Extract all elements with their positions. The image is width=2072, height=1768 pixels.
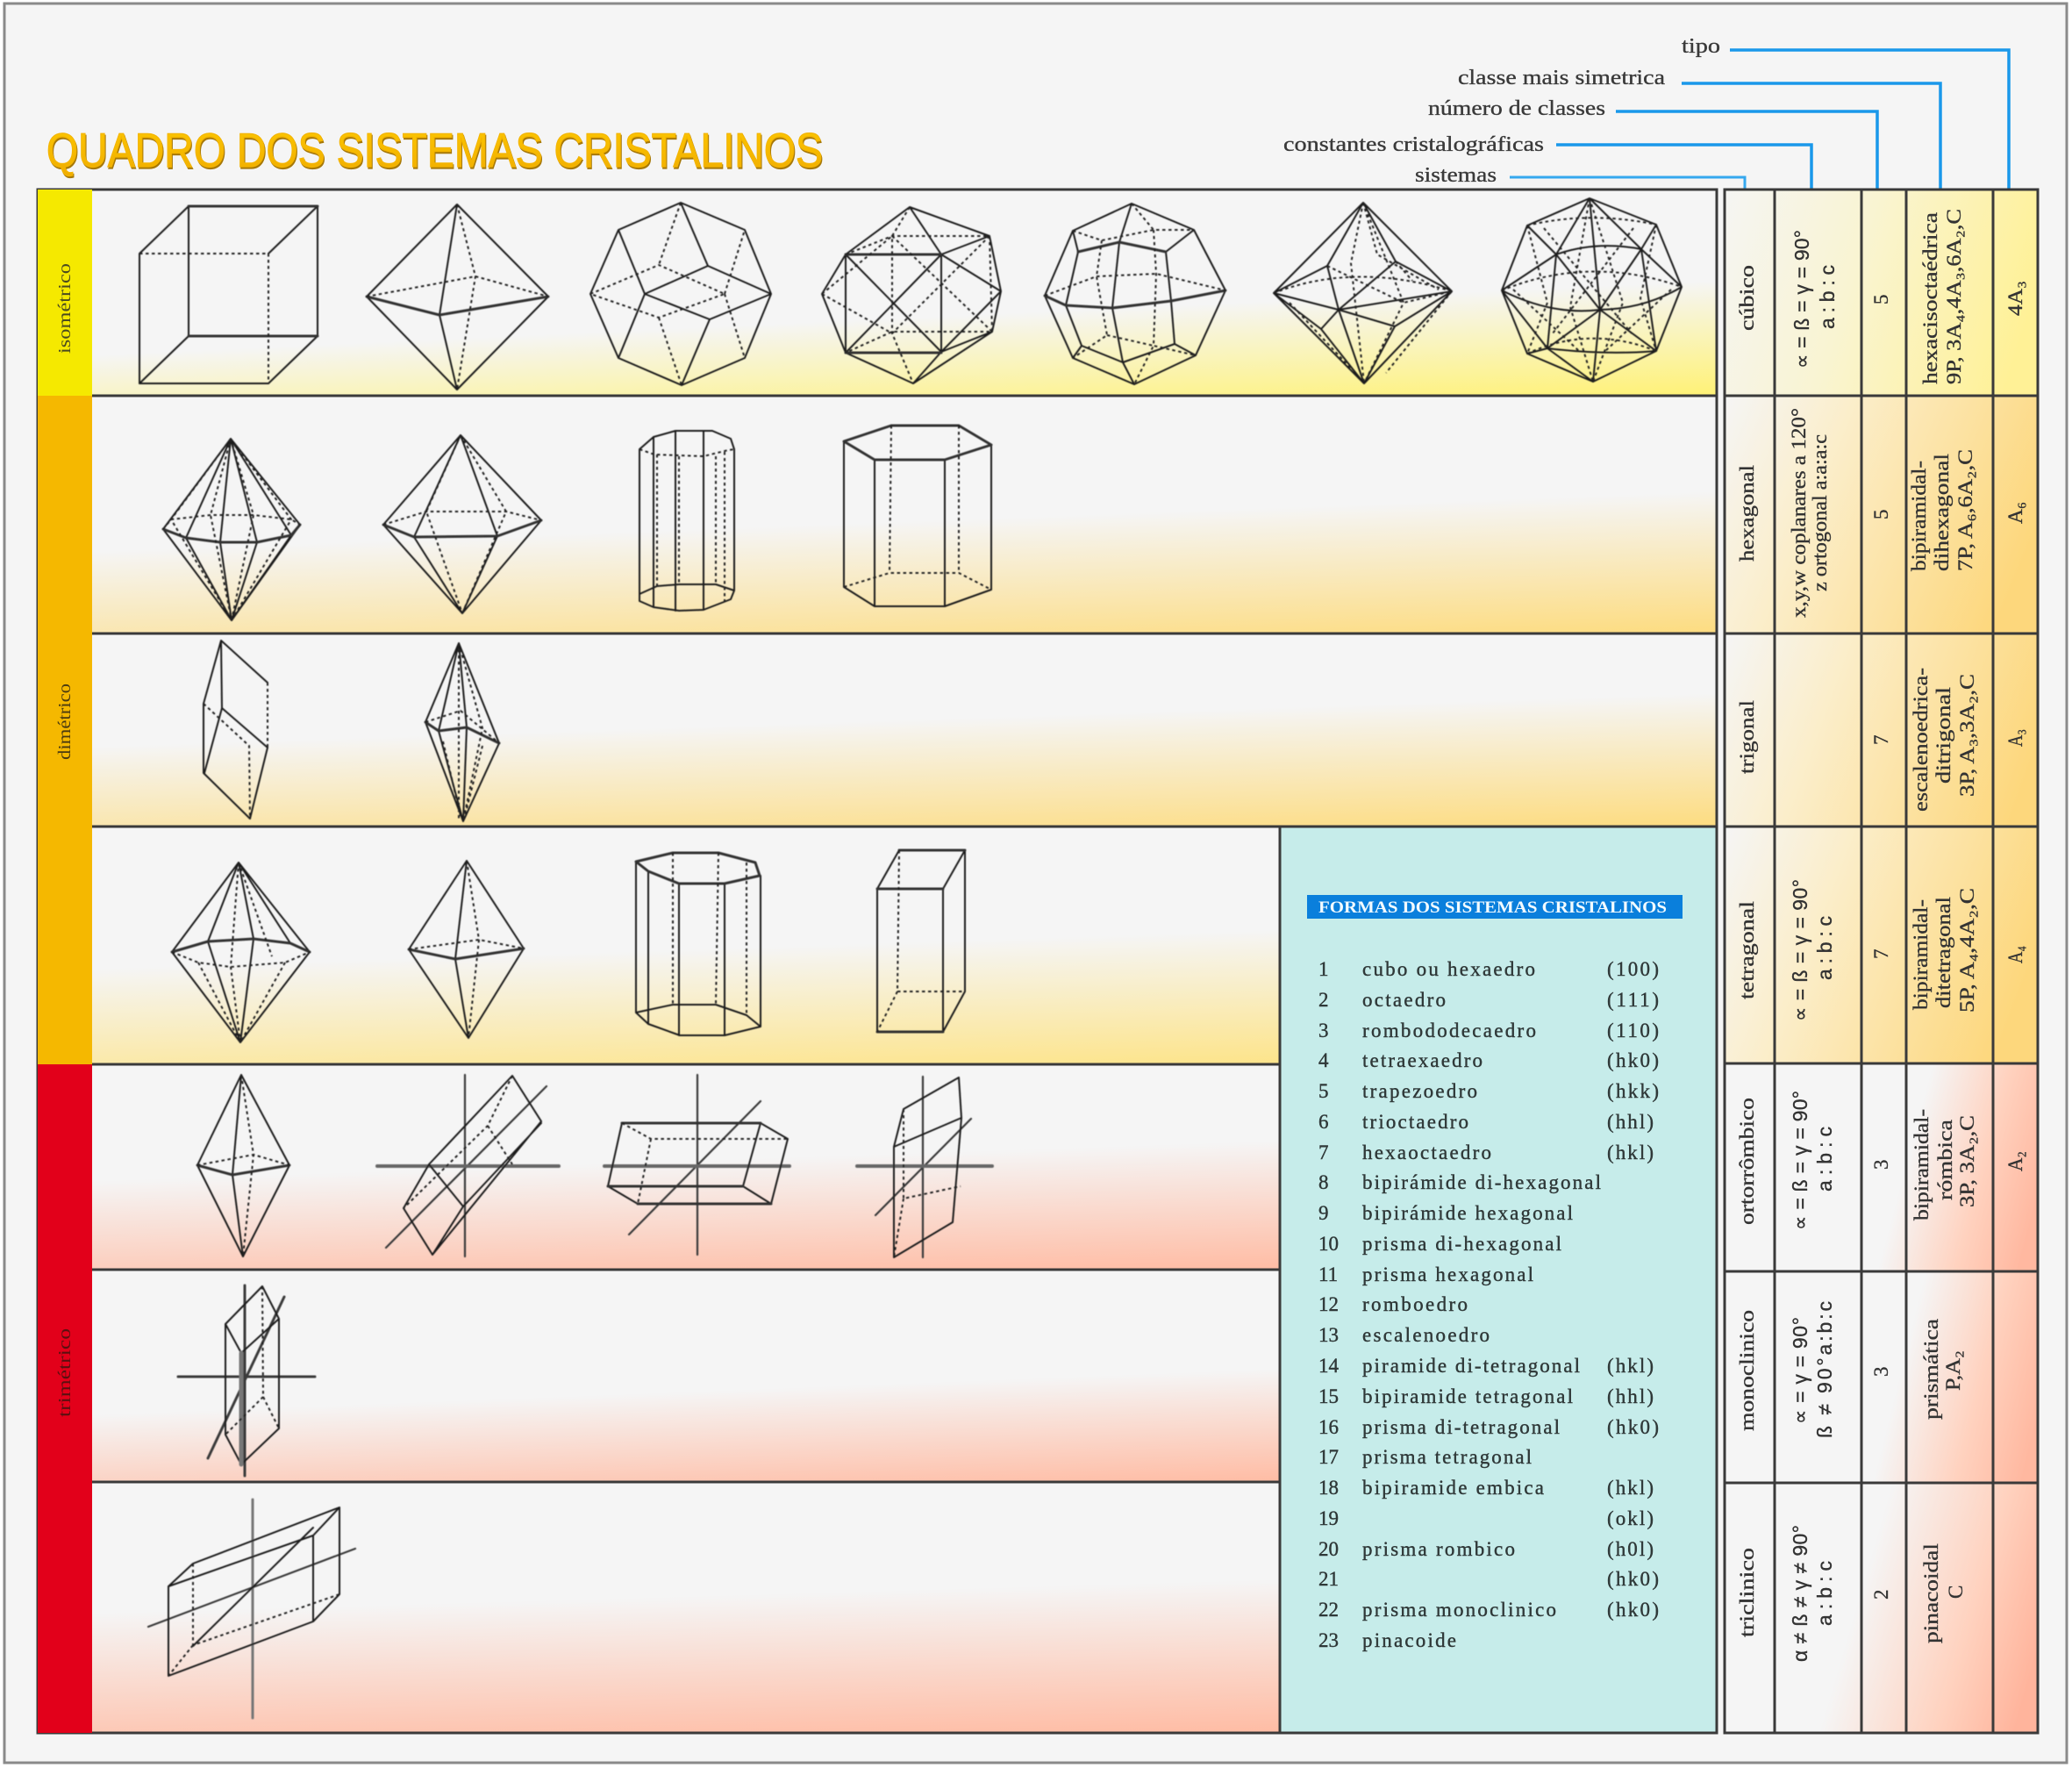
legend Miller indices: (hk0) <box>1607 1568 1659 1590</box>
legend form names: prisma rombico <box>1362 1538 1515 1560</box>
row: triclinico: pinacoidal <box>1920 1543 1942 1643</box>
row: triclinico: 2 <box>1870 1590 1892 1600</box>
legend numbers: 19 <box>1318 1507 1339 1529</box>
key: sistemas <box>1415 164 1745 190</box>
legend numbers: 13 <box>1318 1324 1339 1346</box>
row: trigonal: 3P, A₃,3A₂,C <box>1956 674 1978 797</box>
row: ortorrômbico: a:b:c <box>1813 1127 1836 1192</box>
row 2 crystals: hexagonal <box>163 426 991 620</box>
crystal table grid lines <box>38 190 1717 1733</box>
row: hexagonal: dihexagonal <box>1931 454 1953 571</box>
legend Miller indices: (111) <box>1607 989 1659 1011</box>
row: hexagonal: 7P, A₆,6A₂,C <box>1954 449 1976 571</box>
legend form names: bipirámide di-hexagonal <box>1362 1171 1601 1193</box>
legend Miller indices: (hk0) <box>1607 1049 1659 1071</box>
crystal: octahedron <box>367 204 548 390</box>
crystal: scalenohedron <box>425 643 499 821</box>
legend Miller indices: (hk0) <box>1607 1416 1659 1438</box>
row: trigonal <box>1725 633 2038 827</box>
legend numbers: 4 <box>1318 1049 1329 1071</box>
legend numbers <box>1318 958 1339 1651</box>
legend form names: tetraexaedro <box>1362 1049 1483 1071</box>
key: classe mais simetrica: classe mais simetrica <box>1458 67 1665 89</box>
key: constantes cristalográficas <box>1283 133 1811 190</box>
legend Miller indices: (hkl) <box>1607 1355 1654 1377</box>
crystal: rhombic prism with axes <box>377 1075 559 1256</box>
legend form names: piramide di-tetragonal <box>1362 1355 1580 1377</box>
panel: legend of crystal forms <box>1280 827 1717 1733</box>
row: tetragonal: 5P, A₄,4A₂,C <box>1956 888 1978 1013</box>
crystal: ditetragonal bipyramid <box>172 863 310 1042</box>
row: ortorrômbico <box>1725 1064 2038 1271</box>
row: trigonal: A₃ <box>2004 729 2026 747</box>
properties table <box>1725 190 2038 1733</box>
crystal: tetrakis hexahedron <box>822 207 1001 383</box>
crystal: hexagonal prism <box>844 426 991 606</box>
row: tetragonal: a:b:c <box>1813 916 1836 980</box>
title: QUADRO DOS SISTEMAS CRISTALINOS <box>46 123 823 177</box>
legend form names: cubo ou hexaedro <box>1362 958 1535 980</box>
legend form names: prisma monoclinico <box>1362 1599 1556 1621</box>
legend numbers: 20 <box>1318 1538 1339 1560</box>
key: sistemas: sistemas <box>1415 164 1497 187</box>
legend numbers: 17 <box>1318 1446 1339 1468</box>
row: tetragonal: A₄ <box>2004 946 2026 963</box>
row: ortorrômbico: ∝ = ß = γ = 90° <box>1789 1091 1811 1230</box>
legend heading: FORMAS DOS SISTEMAS CRISTALINOS <box>1318 898 1667 917</box>
row 3 crystals: trigonal <box>204 641 499 821</box>
row: hexagonal: 5 <box>1870 509 1892 519</box>
legend Miller indices: (100) <box>1607 958 1659 980</box>
row 5 crystals: orthorhombic <box>197 1075 992 1257</box>
row: triclinico: triclinico <box>1736 1548 1758 1637</box>
system colour bars <box>38 190 92 1733</box>
crystal: rhombododecahedron <box>590 203 771 385</box>
legend form names: prisma tetragonal <box>1362 1446 1532 1468</box>
row: ortorrômbico: 3P, 3A₂,C <box>1956 1115 1978 1207</box>
row: ortorrômbico: ortorrômbico <box>1736 1098 1758 1225</box>
row: cúbico: 4A₃ <box>2004 281 2026 316</box>
legend Miller indices: (hhl) <box>1607 1385 1654 1407</box>
row: cúbico: a:b:c <box>1816 265 1839 329</box>
row: triclinico <box>1725 1483 2038 1733</box>
legend form names: octaedro <box>1362 989 1446 1011</box>
legend numbers: 11 <box>1318 1263 1338 1285</box>
row: cúbico: 9P, 3A₄,4A₃,6A₂,C <box>1943 209 1965 384</box>
key: classe mais simetrica <box>1458 67 1940 190</box>
bar: trimétrico <box>38 1064 92 1733</box>
row: cúbico: ∝ = ß = γ = 90° <box>1790 230 1813 369</box>
row: hexagonal: z ortogonal a:a:a:c <box>1809 434 1831 591</box>
row 4 crystals: tetragonal <box>172 850 965 1042</box>
legend form names: bipirámide hexagonal <box>1362 1202 1573 1224</box>
crystal: hexoctahedron <box>1502 198 1682 382</box>
crystal: tetragonal bipyramid <box>409 861 524 1038</box>
legend numbers: 15 <box>1318 1385 1339 1407</box>
row: tetragonal: ∝ = ß = γ = 90° <box>1789 879 1811 1021</box>
row: triclinico: C <box>1945 1585 1967 1599</box>
legend numbers: 9 <box>1318 1202 1328 1224</box>
key: tipo <box>1682 35 2009 190</box>
legend numbers: 16 <box>1318 1416 1339 1438</box>
row: ortorrômbico: bipiramidal- <box>1911 1109 1933 1220</box>
crystal: ditetragonal prism <box>636 853 761 1035</box>
legend form names: trapezoedro <box>1362 1080 1477 1102</box>
row: monoclinico: monoclinico <box>1736 1310 1758 1431</box>
legend numbers: 14 <box>1318 1355 1339 1377</box>
legend form names: bipiramide embica <box>1362 1477 1544 1499</box>
legend form names: prisma di-hexagonal <box>1362 1233 1561 1255</box>
legend form names: pinacoide <box>1362 1629 1456 1651</box>
legend Miller indices: (110) <box>1607 1020 1659 1041</box>
legend form names: escalenoedro <box>1362 1324 1490 1346</box>
row: cúbico <box>1725 190 2038 396</box>
legend Miller indices: (hkl) <box>1607 1142 1654 1163</box>
row: trigonal: ditrigonal <box>1933 687 1954 784</box>
row: trigonal: escalenoedrica- <box>1910 668 1932 812</box>
crystal: horizontal prism with axes <box>604 1075 790 1255</box>
legend Miller indices: (hkk) <box>1607 1080 1659 1102</box>
row: tetragonal: 7 <box>1870 949 1892 959</box>
bar: trimétrico: trimétrico <box>55 1328 75 1417</box>
legend Miller indices: (hk0) <box>1607 1599 1659 1621</box>
bar: isométrico: isométrico <box>55 263 75 354</box>
crystal: trapezohedron <box>1045 204 1225 384</box>
row: triclinico: α ≠ ß ≠ γ ≠ 90° <box>1789 1525 1811 1662</box>
legend numbers: 7 <box>1318 1142 1328 1163</box>
key: tipo: tipo <box>1682 35 1720 58</box>
legend form names: prisma hexagonal <box>1362 1263 1533 1285</box>
row: tetragonal: ditetragonal <box>1933 897 1954 1008</box>
bar: dimétrico <box>38 396 92 1064</box>
key: número de classes <box>1428 97 1877 190</box>
row: monoclinico: ∝ = γ = 90° <box>1789 1317 1811 1424</box>
legend numbers: 23 <box>1318 1629 1339 1651</box>
row: ortorrômbico: rómbica <box>1934 1120 1956 1200</box>
crystal row backgrounds <box>92 190 1717 1733</box>
legend form names: bipiramide tetragonal <box>1362 1385 1573 1407</box>
legend numbers: 1 <box>1318 958 1328 980</box>
row: cúbico: 5 <box>1870 295 1892 304</box>
row: hexagonal: bipiramidal- <box>1908 461 1930 571</box>
legend numbers: 5 <box>1318 1080 1328 1102</box>
row: tetragonal: bipiramidal- <box>1910 899 1932 1010</box>
row: trigonal: trigonal <box>1736 700 1758 774</box>
crystal: cube <box>139 206 318 383</box>
bar: isométrico <box>38 190 92 396</box>
row: monoclinico: P,A₂ <box>1942 1350 1964 1391</box>
key: constantes cristalográficas: constantes cristalográficas <box>1283 133 1544 156</box>
crystal: dihexagonal bipyramid <box>163 439 300 620</box>
legend form names: hexaoctaedro <box>1362 1142 1491 1163</box>
bar: dimétrico: dimétrico <box>55 684 75 760</box>
legend numbers: 10 <box>1318 1233 1339 1255</box>
legend numbers: 21 <box>1318 1568 1339 1590</box>
row: monoclinico: prismática <box>1920 1319 1942 1420</box>
legend numbers: 8 <box>1318 1171 1328 1193</box>
legend form names: romboedro <box>1362 1293 1468 1315</box>
row: monoclinico: ß ≠ 90°a:b:c <box>1813 1301 1836 1438</box>
row: ortorrômbico: 3 <box>1870 1160 1892 1170</box>
legend form names: trioctaedro <box>1362 1111 1468 1133</box>
legend form names: rombododecaedro <box>1362 1020 1536 1041</box>
legend form names <box>1362 958 1601 1651</box>
row: hexagonal: x,y,w coplanares a 120° <box>1788 408 1810 618</box>
legend numbers: 18 <box>1318 1477 1339 1499</box>
row: cúbico: hexacisoctaédrica <box>1919 212 1941 384</box>
crystal: rhombic bipyramid <box>197 1075 289 1256</box>
legend numbers: 3 <box>1318 1020 1328 1041</box>
legend Miller indices <box>1607 958 1659 1621</box>
crystal: dihexagonal prism <box>639 431 734 611</box>
row: tetragonal <box>1725 827 2038 1064</box>
row 1 crystals: isometric <box>139 198 1682 390</box>
legend Miller indices: (hkl) <box>1607 1477 1654 1499</box>
row: cúbico: cúbico <box>1736 265 1758 331</box>
legend heading <box>1307 895 1683 919</box>
crystal: hexagonal bipyramid <box>383 435 541 613</box>
row: hexagonal: hexagonal <box>1736 465 1758 562</box>
row: hexagonal <box>1725 396 2038 633</box>
legend Miller indices: (h0l) <box>1607 1538 1654 1560</box>
column key: callouts to table columns <box>1283 35 2009 190</box>
key: número de classes: número de classes <box>1428 97 1605 120</box>
row: ortorrômbico: A₂ <box>2004 1151 2026 1171</box>
row: trigonal: 7 <box>1870 735 1892 745</box>
crystal: inclined prism with axes <box>857 1077 992 1257</box>
row 7 crystal: triclinic <box>148 1500 355 1718</box>
crystal: trisoctahedron <box>1274 203 1452 383</box>
legend numbers: 6 <box>1318 1111 1328 1133</box>
row: monoclinico <box>1725 1271 2038 1483</box>
row: tetragonal: tetragonal <box>1736 901 1758 999</box>
legend form names: prisma di-tetragonal <box>1362 1416 1560 1438</box>
legend Miller indices: (okl) <box>1607 1507 1654 1529</box>
row: triclinico: a:b:c <box>1813 1561 1836 1626</box>
legend numbers: 2 <box>1318 989 1328 1011</box>
row: hexagonal: A₆ <box>2004 502 2026 524</box>
crystal: rhombohedron <box>204 641 268 819</box>
legend numbers: 22 <box>1318 1599 1339 1621</box>
legend numbers: 12 <box>1318 1293 1339 1315</box>
crystal: tetragonal prism <box>877 850 965 1032</box>
row: monoclinico: 3 <box>1870 1367 1892 1377</box>
row 6 crystal: monoclinic <box>178 1285 315 1476</box>
legend Miller indices: (hhl) <box>1607 1111 1654 1133</box>
